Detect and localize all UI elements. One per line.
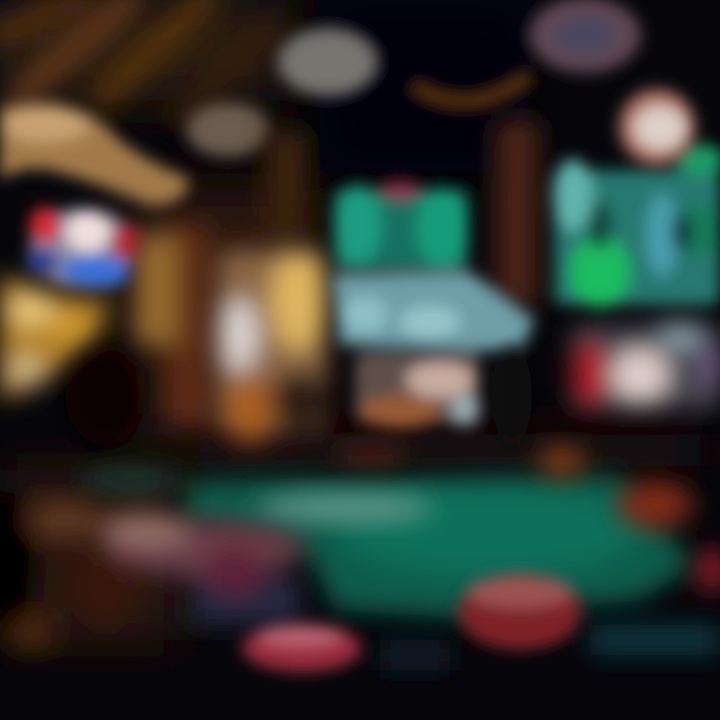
dark blue foreground glow	[380, 625, 720, 670]
tan hat	[0, 103, 188, 205]
warm lit centre panel	[218, 250, 330, 442]
wooden pillars	[135, 120, 539, 425]
lower left warm blur	[0, 490, 135, 650]
pink and white ball top right	[619, 89, 695, 165]
green poker table	[80, 468, 695, 618]
red white and blue ball	[26, 207, 139, 289]
right red and white cards	[572, 321, 720, 410]
pink and navy chips left of table	[100, 514, 305, 625]
orange chips at table edge	[334, 445, 720, 592]
right green display	[553, 144, 720, 308]
golden chips pile	[0, 275, 110, 400]
wooden ceiling beams	[0, 0, 275, 115]
red chip stack right	[458, 574, 582, 650]
white cards on table	[257, 493, 433, 523]
teal and pale blue centre display	[332, 181, 535, 428]
red chip stack centre	[242, 624, 362, 672]
dark figure in centre	[492, 345, 532, 445]
hanging lamps	[186, 0, 641, 157]
dark figure on left	[65, 345, 145, 445]
